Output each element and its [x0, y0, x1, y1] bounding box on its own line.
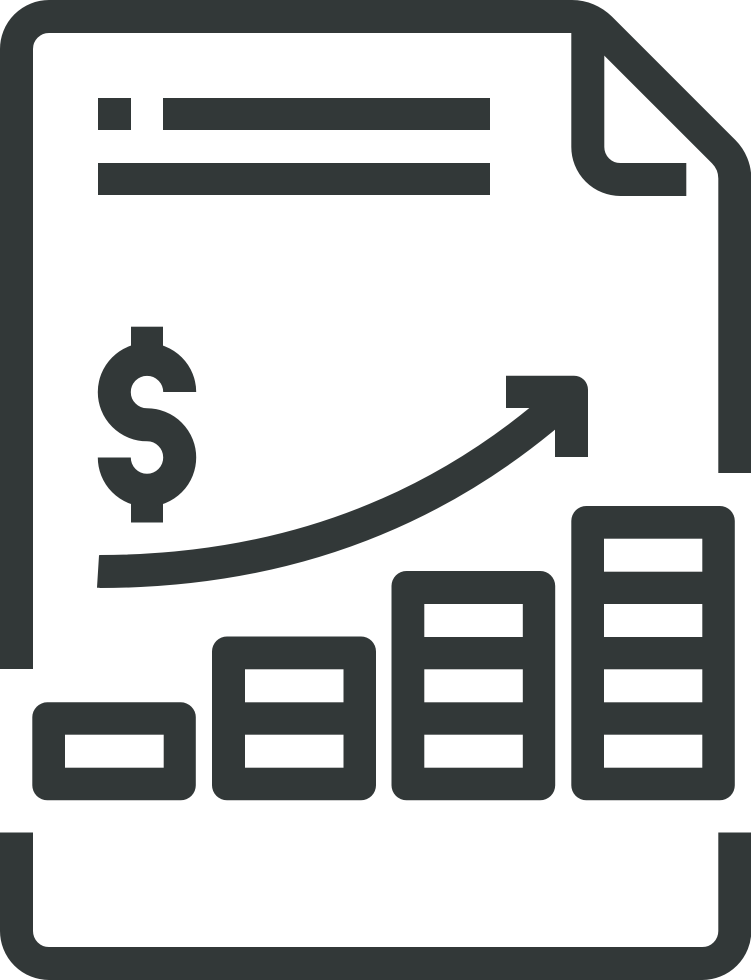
coin stack 3: [392, 571, 555, 800]
page fold: [588, 25, 686, 180]
coin stack 1: [32, 702, 196, 800]
coin stack 4: [571, 506, 735, 800]
icon: dollar sign: [114, 327, 180, 522]
heading lines: [98, 98, 490, 195]
arrow: rising trend: [97, 376, 588, 588]
document outline upper: [16, 16, 735, 669]
coin stack 2: [212, 636, 376, 800]
document outline lower: [16, 832, 735, 964]
